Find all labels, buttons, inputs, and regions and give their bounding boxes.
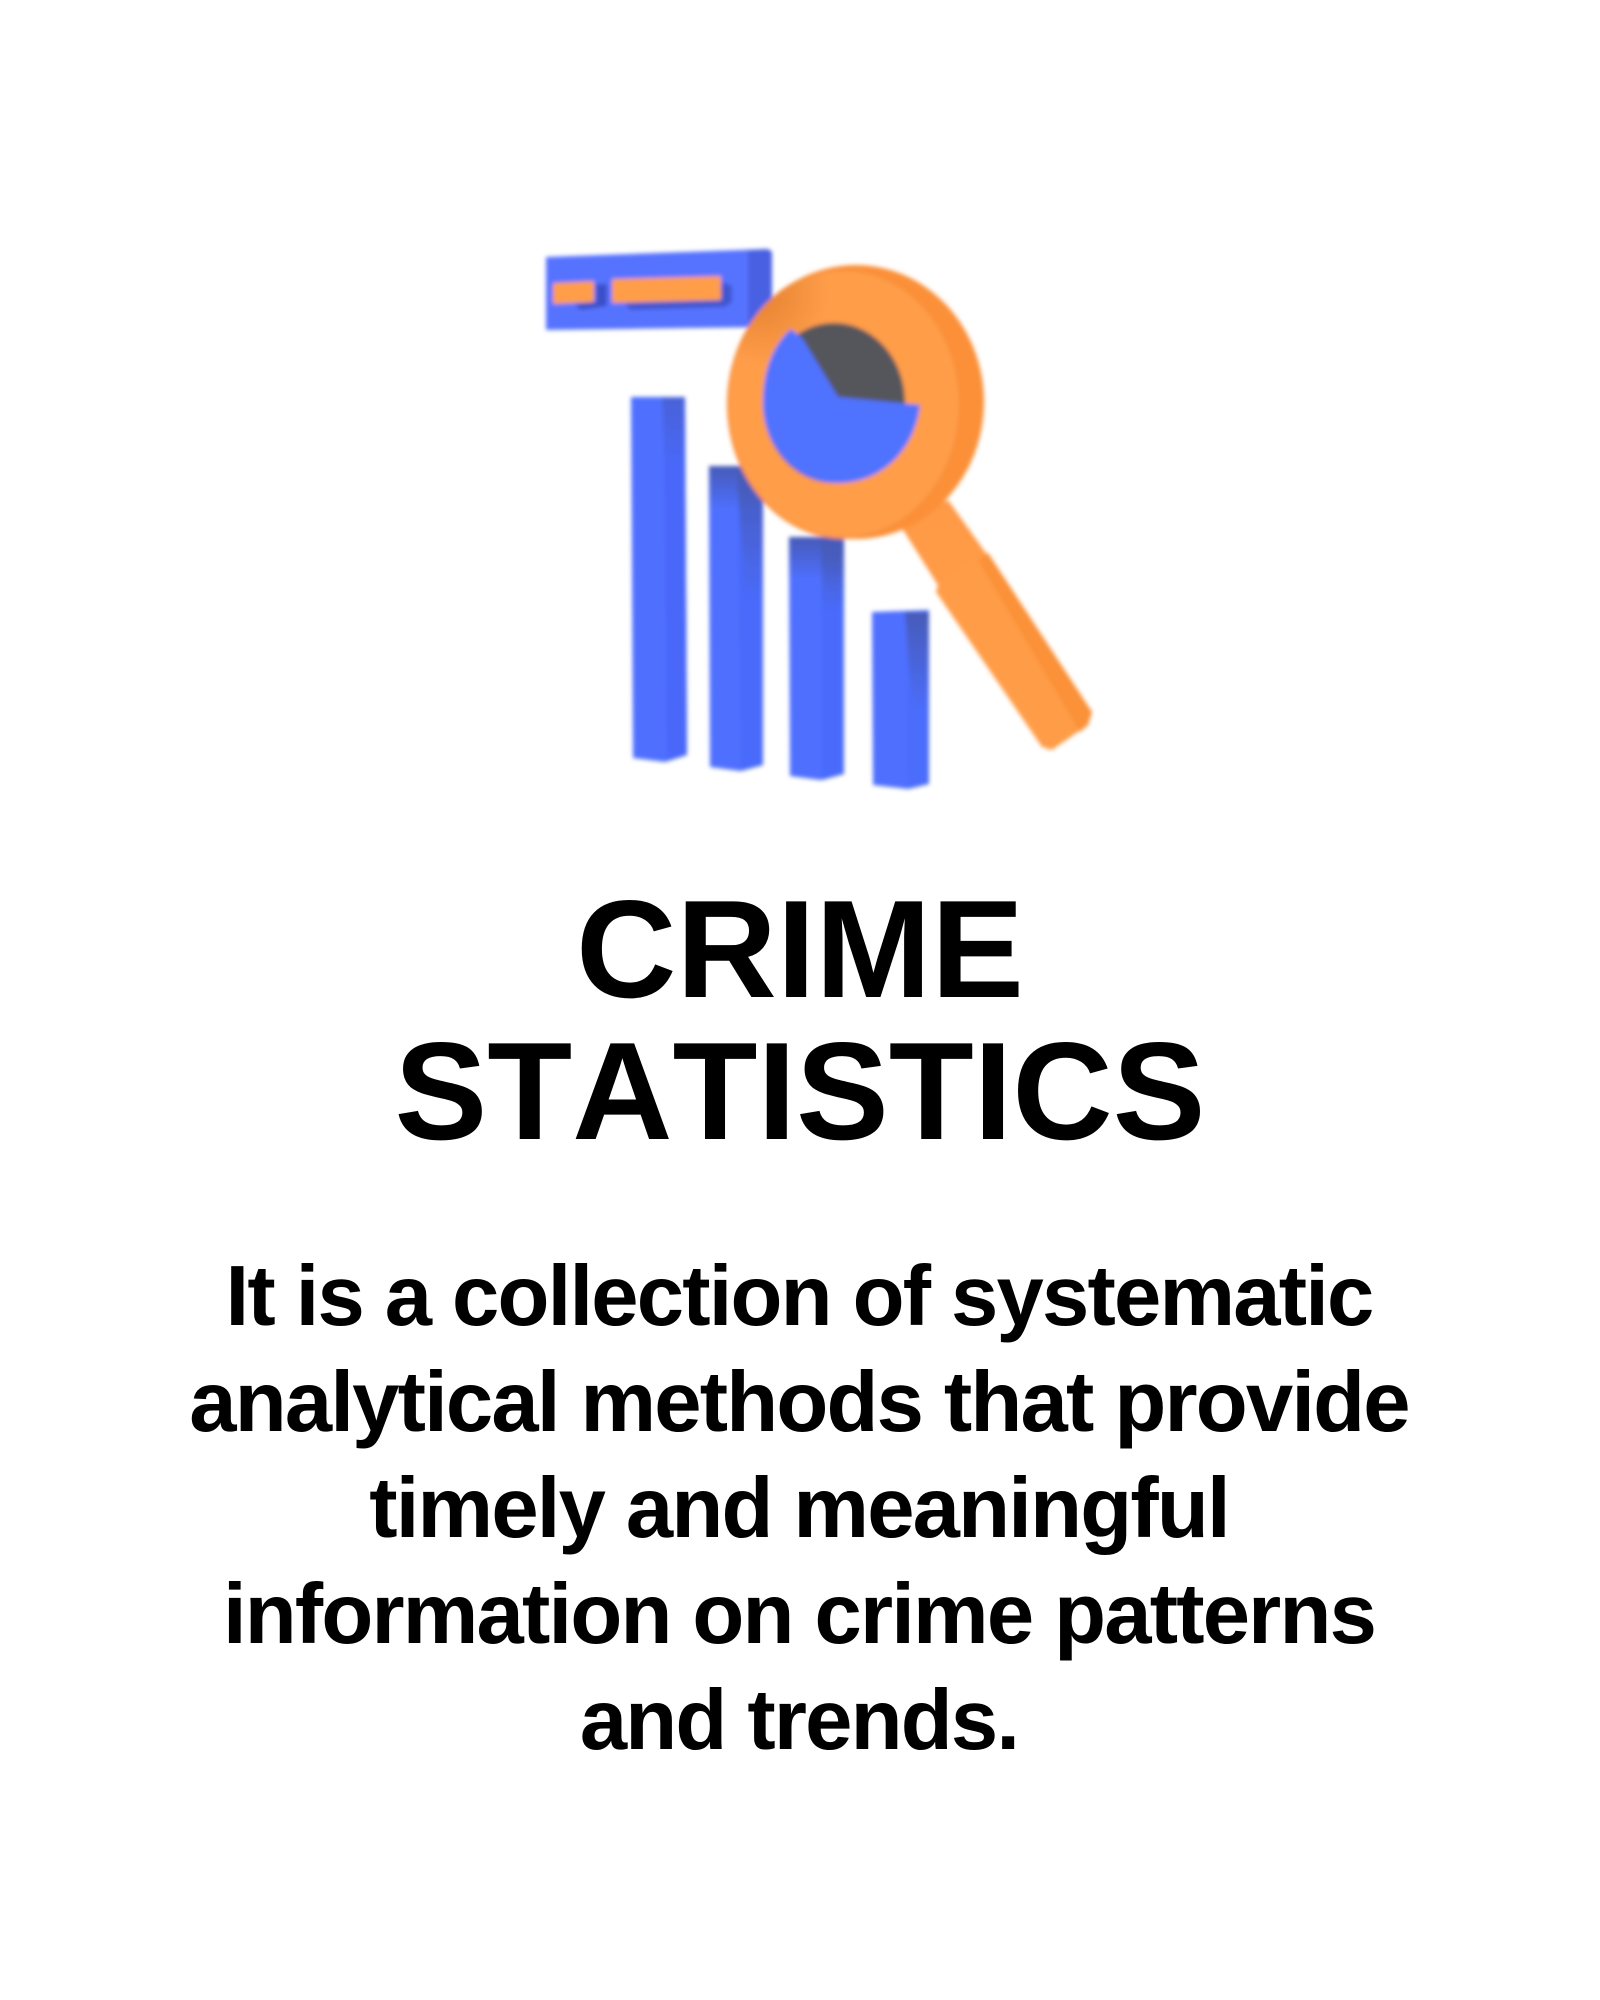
title: STATISTICS [395,1014,1205,1169]
description text: It is a collection of systematic [226,1249,1372,1344]
magnifying glass handle [900,500,1092,750]
bar 2 [709,466,763,771]
icon: bar chart with magnifying glass [542,246,1096,792]
bar 3 [789,537,844,780]
description text: information on crime patterns [223,1567,1375,1662]
lens: pie chart [763,323,920,483]
description text: and trends. [580,1673,1018,1768]
banner [546,249,772,330]
description text: analytical methods that provide [189,1355,1409,1450]
title: CRIME [576,872,1024,1027]
description text: timely and meaningful [369,1461,1229,1556]
title [395,872,1205,1169]
bar 1 [631,397,687,762]
magnifying glass rim [723,261,988,543]
description text [189,1249,1409,1768]
bar 4 [872,610,929,789]
